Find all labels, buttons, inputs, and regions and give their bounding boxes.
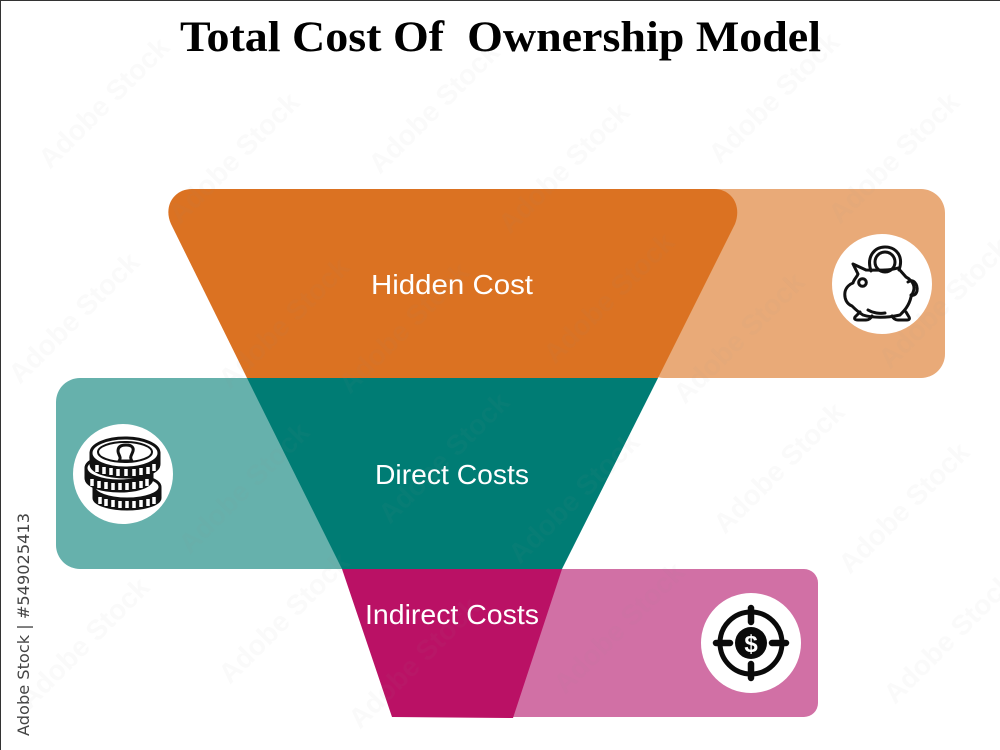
panel: hidden cost backing bar	[640, 189, 945, 378]
funnel segment: direct costs	[247, 378, 658, 569]
infographic canvas: Adobe Stock	[172, 416, 316, 559]
infographic canvas: Adobe Stock	[362, 36, 506, 179]
funnel segment: hidden cost	[168, 189, 737, 378]
infographic canvas: Adobe Stock	[822, 86, 966, 229]
infographic canvas: Adobe Stock	[32, 31, 176, 174]
infographic canvas: Adobe Stock	[707, 396, 851, 539]
infographic canvas: Adobe Stock	[342, 591, 486, 734]
infographic canvas: Adobe Stock	[2, 246, 146, 389]
icon: dollar target: $	[744, 631, 758, 658]
funnel segment: indirect costs	[342, 569, 562, 718]
infographic canvas: Adobe Stock	[537, 226, 681, 369]
infographic canvas: Adobe Stock	[832, 436, 976, 579]
infographic canvas: Adobe Stock	[547, 556, 691, 699]
icon: dollar target	[701, 593, 801, 693]
infographic canvas: Adobe Stock	[332, 256, 476, 399]
panel: direct costs backing bar	[56, 378, 345, 569]
infographic canvas: Adobe Stock	[12, 571, 156, 714]
panel: indirect costs backing bar	[500, 569, 818, 717]
infographic canvas: Adobe Stock	[212, 251, 356, 394]
infographic canvas: Adobe Stock	[502, 426, 646, 569]
icon: piggy bank	[832, 234, 932, 334]
infographic canvas: Adobe Stock	[492, 96, 636, 239]
infographic canvas: Adobe Stock	[372, 386, 516, 529]
infographic canvas: Adobe Stock	[162, 86, 306, 229]
title: Total Cost Of Ownership Model	[180, 14, 821, 61]
label: direct costs: Direct Costs	[375, 459, 529, 490]
label: indirect costs: Indirect Costs	[365, 599, 539, 630]
infographic canvas: Adobe Stock	[212, 546, 356, 689]
infographic canvas: Adobe Stock	[702, 26, 846, 169]
infographic canvas: Adobe Stock	[667, 266, 811, 409]
icon: coin stack	[73, 424, 173, 524]
side credit: Adobe Stock | #549025413	[14, 513, 33, 736]
label: hidden cost: Hidden Cost	[371, 269, 533, 300]
